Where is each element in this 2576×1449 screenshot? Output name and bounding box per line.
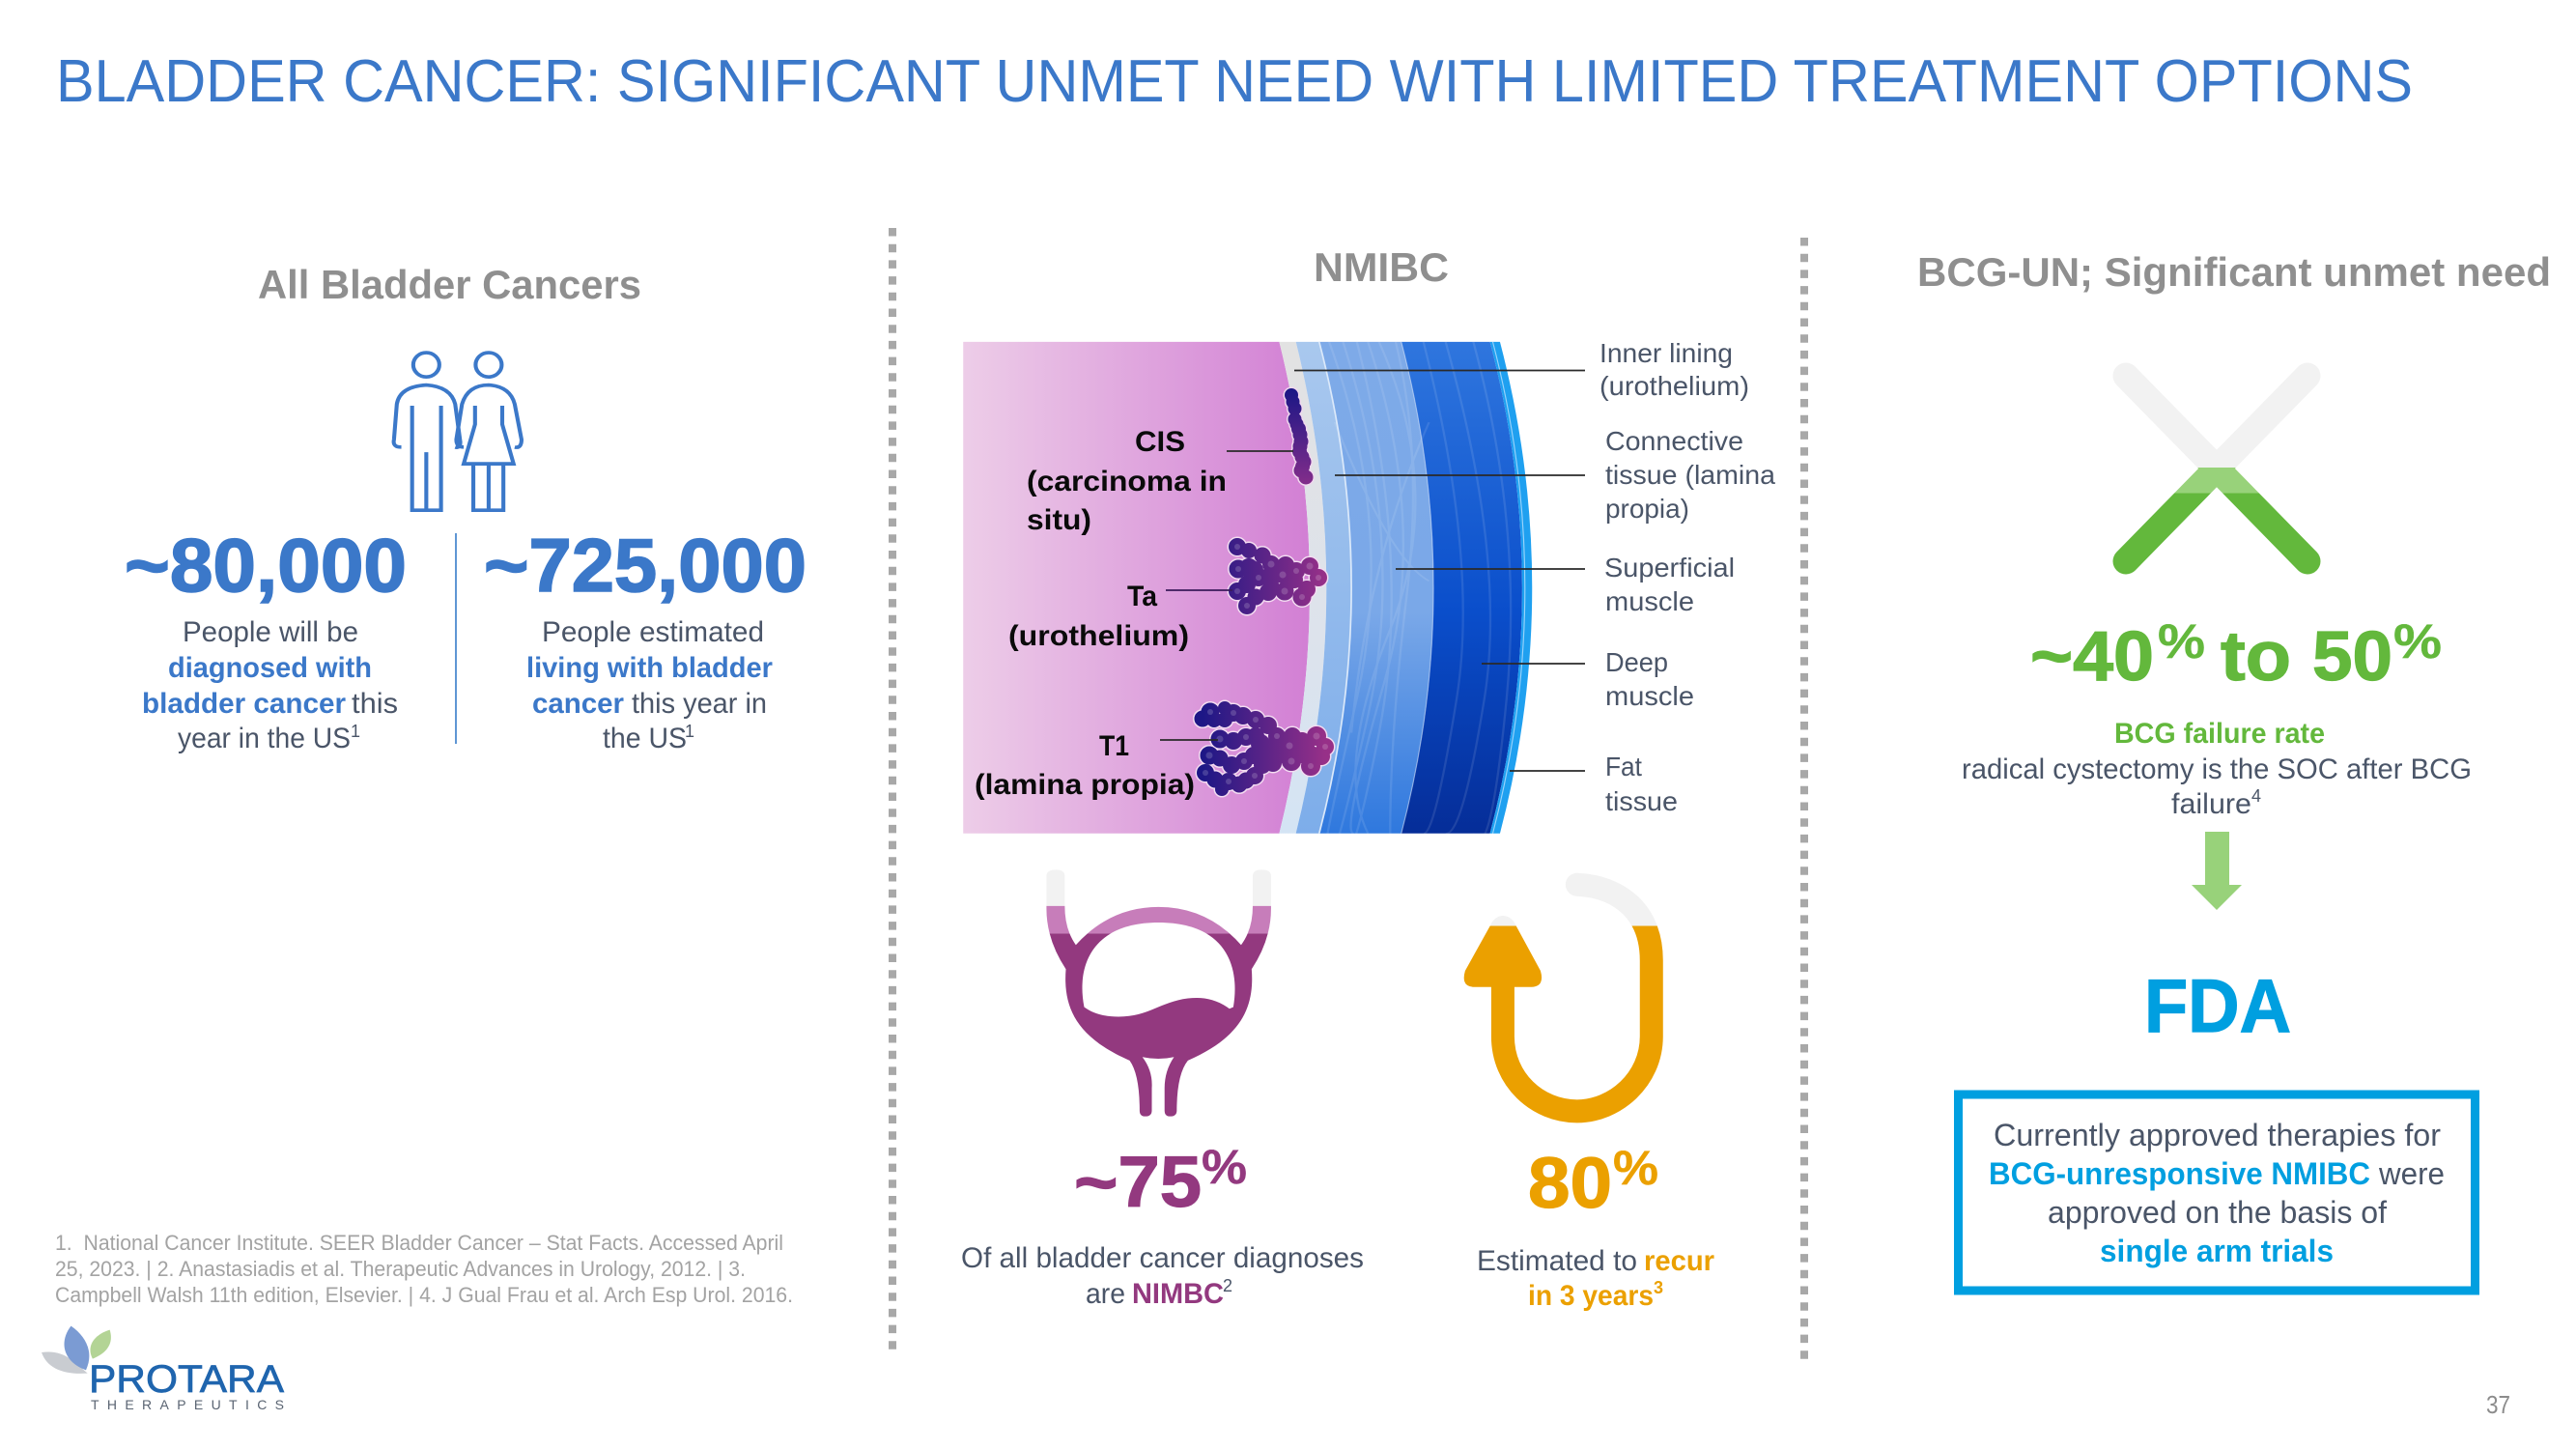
description: NIMBC share: Of all bladder cancer diagnoses <box>961 1242 1364 1274</box>
description: diagnosed: bladder cancer <box>142 688 346 720</box>
vertical divider between stats <box>455 533 457 744</box>
stat: 80 percent: 80 <box>1528 1143 1612 1223</box>
description: diagnosed: People will be <box>183 616 358 648</box>
callout: approved therapies: were <box>2378 1156 2445 1191</box>
description: diagnosed: year in the US <box>178 723 351 754</box>
description: living with: this year in <box>632 688 767 720</box>
stat: about 75 percent <box>1074 1140 1247 1222</box>
description: recurrence: in 3 years <box>1528 1280 1654 1312</box>
layer labels: (urothelium) <box>1599 371 1749 401</box>
logo wordmark: PROTARA <box>89 1358 284 1401</box>
logo: Protara Therapeutics <box>42 1326 284 1412</box>
callout: approved therapies: Currently approved therapies for <box>1994 1118 2441 1152</box>
arrow: down to FDA <box>2192 832 2242 910</box>
icon: two people <box>394 353 522 510</box>
footnotes <box>55 1231 793 1307</box>
layer labels: Superficial <box>1604 553 1735 582</box>
tumor stage labels <box>975 426 1227 801</box>
FDA label: FDA <box>2144 963 2291 1048</box>
leader lines <box>1160 371 1585 771</box>
description: recurrence <box>1477 1245 1714 1312</box>
description: living with <box>526 616 773 754</box>
description: living with: 1 <box>685 722 694 741</box>
description: living with: the US <box>603 723 687 754</box>
icon: bladder fill gauge <box>1046 869 1271 1117</box>
tumor: CIS <box>1287 390 1312 483</box>
description: NIMBC share: are <box>1086 1278 1125 1310</box>
description: BCG failure rate: 4 <box>2251 786 2261 806</box>
description: recurrence: 3 <box>1654 1278 1663 1297</box>
dashed divider left <box>889 228 896 1350</box>
heading: BCG-UN significant unmet need: BCG-UN; Significant unmet need <box>1917 249 2551 295</box>
description: diagnosed: this <box>352 688 398 720</box>
tumor stage labels: (carcinoma in <box>1027 466 1227 497</box>
layer labels: tissue (lamina <box>1605 460 1775 490</box>
tumor stage labels: (lamina propia) <box>975 769 1195 801</box>
tumor stage labels: situ) <box>1027 504 1091 536</box>
description: living with: living with bladder <box>526 652 773 684</box>
tumor stage labels: CIS <box>1135 426 1185 458</box>
description: NIMBC share: NIMBC <box>1132 1278 1224 1310</box>
stat: about 80,000 diagnosed: ~80,000 <box>125 523 407 608</box>
page number: 37 <box>2486 1390 2510 1419</box>
logo tagline: THERAPEUTICS <box>91 1397 284 1412</box>
stat: about 75 percent: % <box>1202 1140 1247 1194</box>
stat: 80 percent <box>1528 1141 1658 1223</box>
callout: approved therapies <box>1959 1094 2475 1291</box>
diagram: bladder wall layers <box>963 338 1775 855</box>
icon: recurrence arrow <box>1464 885 1652 1111</box>
stat: 40 to 50 percent: % <box>2393 614 2442 668</box>
layer labels: Inner lining <box>1599 338 1733 368</box>
callout: approved therapies: BCG-unresponsive NMIBC <box>1989 1156 2370 1191</box>
description: NIMBC share: 2 <box>1223 1276 1232 1295</box>
description: diagnosed <box>142 616 398 754</box>
callout: approved therapies: approved on the basis of <box>2048 1195 2387 1230</box>
tumor stage labels: (urothelium) <box>1008 620 1189 652</box>
layer labels <box>1599 338 1775 816</box>
icon: leaves <box>42 1326 111 1374</box>
description: BCG failure rate: BCG failure rate <box>2114 718 2325 750</box>
stat: 40 to 50 percent: 50 <box>2312 618 2392 696</box>
footnotes: Campbell Walsh 11th edition, Elsevier. | 4. J Gual Frau et al. Arch Esp Urol. 2016. <box>55 1283 793 1307</box>
description: diagnosed: 1 <box>351 722 360 741</box>
tumor stage labels: T1 <box>1099 730 1129 762</box>
footnotes: 25, 2023. | 2. Anastasiadis et al. Therapeutic Advances in Urology, 2012. | 3. <box>55 1257 746 1281</box>
stat: 40 to 50 percent: to <box>2221 618 2291 696</box>
stat: 40 to 50 percent: ~40 <box>2030 618 2154 696</box>
heading: all bladder cancers: All Bladder Cancers <box>258 262 641 307</box>
description: living with: cancer <box>532 688 624 720</box>
callout: approved therapies: single arm trials <box>2100 1234 2334 1268</box>
icon: failure X gauge <box>2126 376 2307 561</box>
panel: NMIBC <box>961 244 1775 1312</box>
stat: 40 to 50 percent <box>2030 614 2442 696</box>
description: living with: People estimated <box>542 616 764 648</box>
footnotes: 1. National Cancer Institute. SEER Bladder Cancer – Stat Facts. Accessed April <box>55 1231 783 1255</box>
tumor: T1 <box>1196 703 1332 794</box>
description: BCG failure rate: failure <box>2171 788 2251 820</box>
tumor stage labels: Ta <box>1127 581 1157 612</box>
layer labels: Deep <box>1605 647 1668 677</box>
stat: about 75 percent: ~75 <box>1074 1142 1202 1222</box>
layer labels: Fat <box>1605 752 1642 781</box>
description: diagnosed: diagnosed with <box>168 652 372 684</box>
layer labels: propia) <box>1605 494 1689 524</box>
stat: 40 to 50 percent: % <box>2158 614 2205 668</box>
tumor: Ta <box>1231 540 1325 612</box>
panel: all bladder cancers <box>125 262 807 754</box>
heading: NMIBC: NMIBC <box>1314 244 1449 290</box>
panel: BCG-UN <box>1917 249 2551 1291</box>
dashed divider right <box>1800 238 1808 1360</box>
description: BCG failure rate: radical cystectomy is the SOC after BCG <box>1962 753 2472 785</box>
stat: about 725,000 living: ~725,000 <box>484 523 807 608</box>
layer labels: muscle <box>1605 681 1694 711</box>
description: NIMBC share <box>961 1242 1364 1310</box>
layer labels: muscle <box>1605 586 1694 616</box>
description: recurrence: recur <box>1644 1245 1714 1277</box>
description: BCG failure rate <box>1962 718 2472 820</box>
stat: 80 percent: % <box>1613 1141 1658 1195</box>
layer labels: Connective <box>1605 426 1743 456</box>
layer labels: tissue <box>1605 786 1678 816</box>
title: BLADDER CANCER: SIGNIFICANT UNMET NEED WITH LIMITED TREATMENT OPTIONS <box>56 48 2413 115</box>
description: recurrence: Estimated to <box>1477 1245 1637 1277</box>
